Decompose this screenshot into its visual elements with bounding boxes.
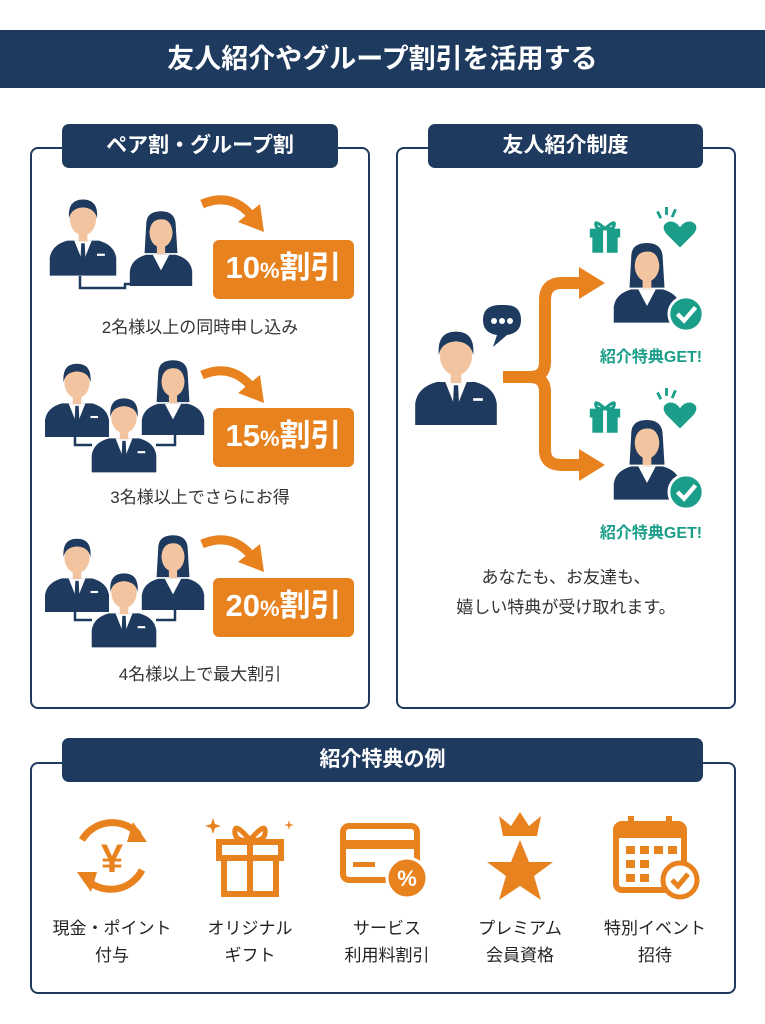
panel: group discount (30, 147, 370, 709)
icon: gift: ギフト (224, 946, 276, 965)
heading: group discount: ペア割・グループ割 (106, 134, 294, 157)
heading: group discount (62, 124, 338, 168)
icon: cash: 付与 (95, 946, 129, 965)
icon: premium star: プレミアム (478, 919, 562, 938)
icon: card: 利用料割引 (344, 946, 430, 965)
title (0, 30, 765, 88)
icon: calendar (604, 816, 706, 965)
icon: cash (52, 819, 172, 965)
icon: cash: 現金・ポイント (52, 919, 172, 938)
heading: referral (428, 124, 703, 168)
badge 20% (213, 578, 354, 637)
caption: 2名様以上の同時申し込み (102, 318, 298, 337)
row: 10% (50, 195, 354, 337)
label GET 1: 紹介特典GET! (600, 349, 702, 366)
row: 15% (44, 360, 354, 507)
icon: calendar: 招待 (638, 946, 672, 965)
icon: cash: ¥ (101, 837, 124, 881)
label GET 2: 紹介特典GET! (600, 525, 702, 542)
title: 友人紹介やグループ割引を活用する (167, 44, 598, 74)
caption: 3名様以上でさらにお得 (110, 488, 290, 507)
icon: gift (205, 818, 294, 965)
panel: referral (396, 147, 736, 709)
badge 20%: 20%割引 (225, 588, 342, 623)
caption: 4名様以上で最大割引 (119, 665, 281, 684)
heading: examples (62, 738, 703, 782)
icon: premium star (478, 812, 562, 965)
referral message (456, 568, 676, 617)
panel: examples (30, 762, 736, 994)
badge 15% (213, 408, 354, 467)
referral message: あなたも、お友達も、 (482, 568, 650, 587)
referral diagram (415, 207, 702, 542)
heading: examples: 紹介特典の例 (320, 748, 446, 771)
icon: premium star: 会員資格 (486, 946, 554, 965)
badge 10%: 10%割引 (225, 250, 342, 285)
row: 20% (44, 535, 354, 684)
icon: card: % (397, 866, 417, 891)
icon: gift: オリジナル (208, 919, 292, 938)
referral message: 嬉しい特典が受け取れます。 (456, 598, 676, 617)
badge 10% (213, 240, 354, 299)
icon: card: サービス (353, 919, 421, 938)
icon: calendar: 特別イベント (604, 919, 706, 938)
icon: card (340, 823, 430, 965)
badge 15%: 15%割引 (225, 418, 342, 453)
heading: referral: 友人紹介制度 (502, 134, 628, 157)
